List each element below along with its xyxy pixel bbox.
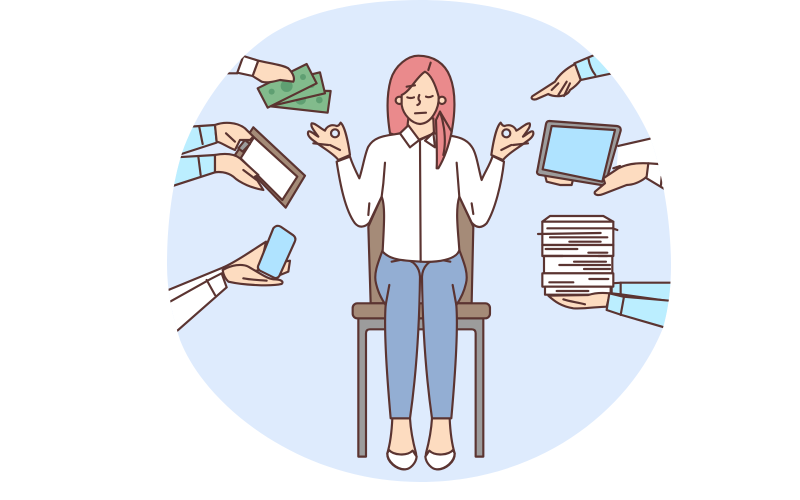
ears <box>396 97 446 104</box>
fingers behind phone <box>280 261 290 275</box>
front sleeve <box>607 293 673 330</box>
left foot and shoe <box>387 418 417 469</box>
illustration <box>167 0 671 482</box>
middle bill <box>268 72 325 107</box>
palm <box>223 265 283 285</box>
back of hand and thumb <box>223 242 266 273</box>
upper sleeve and hand <box>173 123 253 157</box>
hair back <box>388 56 454 140</box>
surrounding hands <box>160 54 673 337</box>
top bill <box>258 64 317 108</box>
left jeans leg <box>375 248 420 418</box>
shirt seams <box>368 142 473 262</box>
tablet hand <box>595 163 648 195</box>
white sleeve <box>169 269 226 330</box>
hand under stack <box>548 293 610 308</box>
tablet <box>537 121 621 185</box>
chair seat <box>353 303 490 318</box>
left hand <box>308 123 350 160</box>
collar <box>400 125 435 147</box>
chair back <box>368 197 473 303</box>
phone hand <box>160 226 295 337</box>
paper stack hand <box>538 216 673 330</box>
pointing hand <box>532 64 581 99</box>
right hand <box>491 123 533 160</box>
pointing sleeve <box>573 54 612 81</box>
tablet fingers <box>545 175 573 185</box>
lower sleeve and hand <box>163 154 263 190</box>
bottom bill <box>268 90 331 113</box>
white sleeve behind tablet <box>616 140 663 187</box>
back sleeve <box>612 283 673 302</box>
neck <box>407 118 434 140</box>
white shirt <box>337 133 504 262</box>
phone <box>258 226 295 278</box>
right jeans leg <box>422 248 467 418</box>
chair and legs <box>353 248 490 469</box>
clipboard <box>235 127 305 208</box>
paper stack <box>538 216 617 295</box>
hair front strand <box>436 112 452 168</box>
chair frame <box>358 318 483 457</box>
face <box>402 72 439 124</box>
money and clipboard hands <box>163 56 331 208</box>
pointing hand and tablet hand <box>532 54 673 195</box>
background blob <box>167 0 671 482</box>
facial features <box>407 63 433 113</box>
crotch of jeans <box>412 260 430 280</box>
woman upper body <box>308 56 533 262</box>
right foot and shoe <box>425 418 455 469</box>
money hand <box>224 56 294 82</box>
